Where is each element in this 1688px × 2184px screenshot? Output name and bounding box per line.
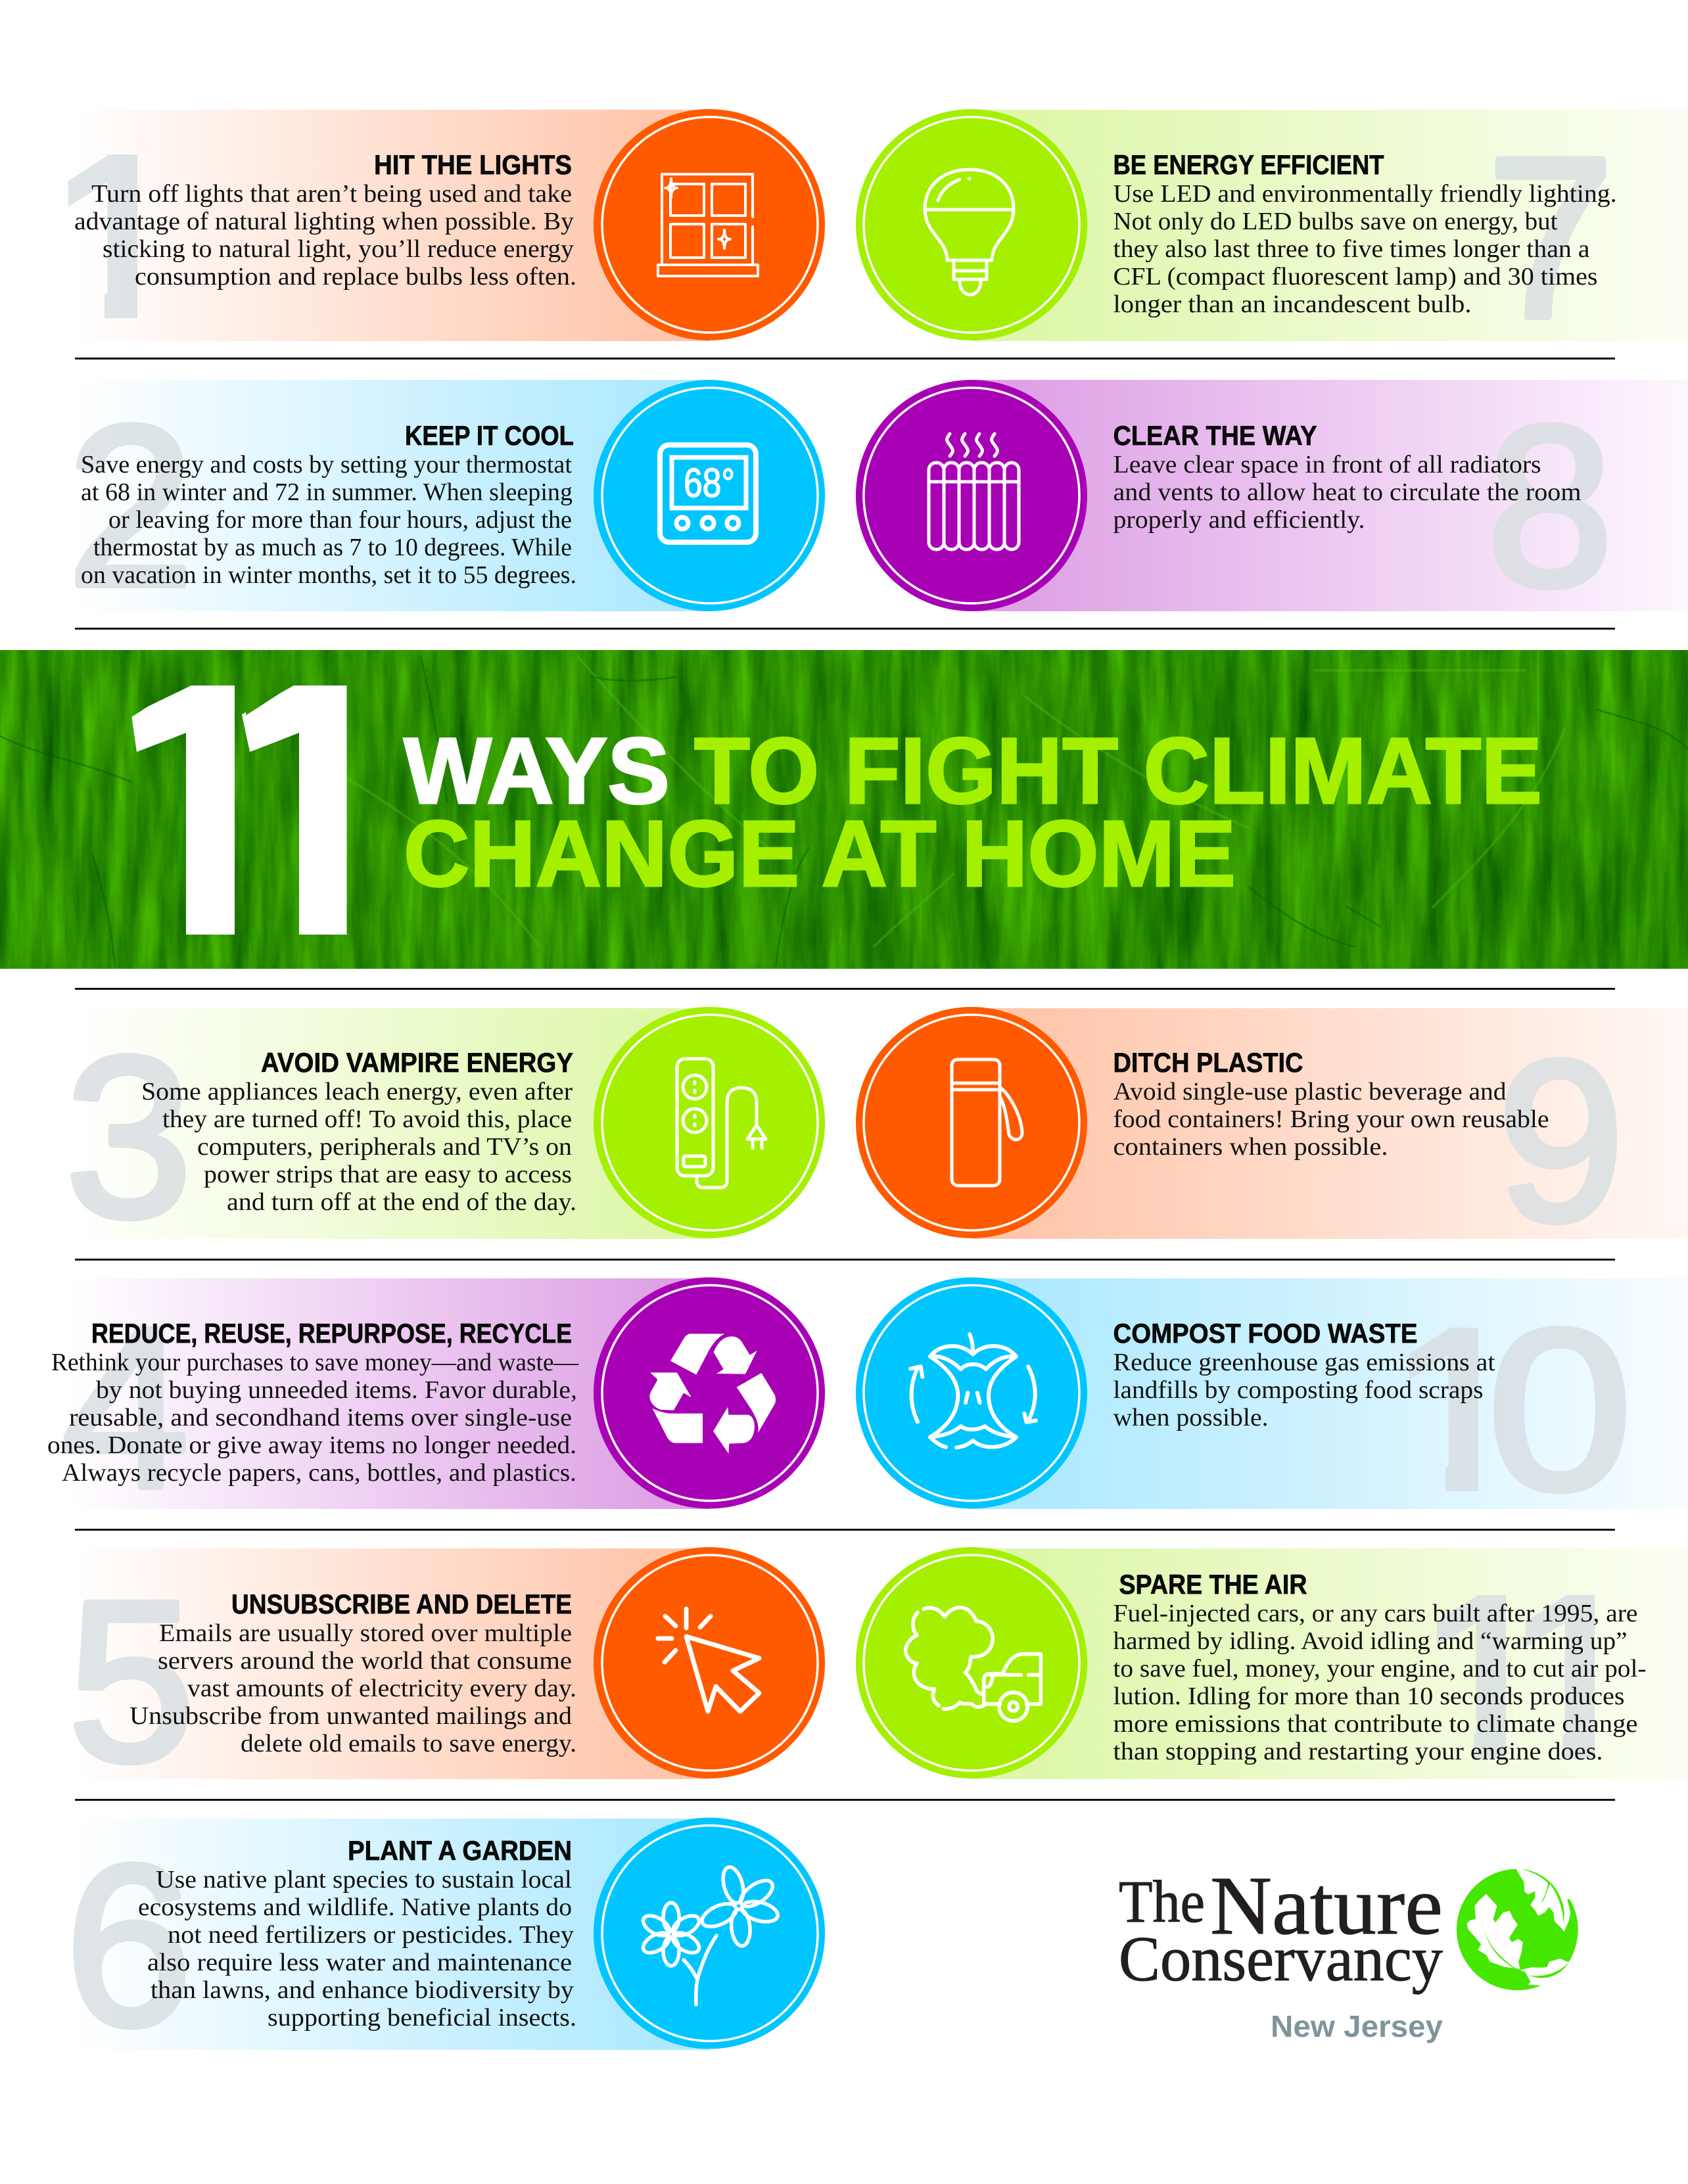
body text: they also last three to five times longer than a (1114, 235, 1590, 263)
number 10: 1 (1393, 1276, 1525, 1542)
body text: power strips that are easy to access (204, 1161, 572, 1188)
rule (75, 1259, 1615, 1261)
icon: thermostat: 68° (684, 461, 735, 506)
rule (75, 358, 1615, 360)
body text: Rethink your purchases to save money—and waste— (51, 1349, 579, 1376)
number 7: 7 (1487, 110, 1614, 365)
icon: apple core compost (910, 1334, 1036, 1447)
title: TO FIGHT CLIMATE (694, 719, 1542, 824)
body text: containers when possible. (1114, 1133, 1388, 1161)
band (972, 1008, 1688, 1239)
number 10: 0 (1488, 1282, 1632, 1538)
body text: Always recycle papers, cans, bottles, and plastics. (62, 1459, 576, 1487)
panel: 9 ditch plastic (856, 1007, 1688, 1268)
rule (75, 628, 1615, 630)
icon: power strip (677, 1059, 766, 1188)
panel: 3 avoid vampire energy (65, 1007, 825, 1265)
icon: car exhaust cloud (906, 1608, 1041, 1721)
panel: 10 compost food waste (856, 1278, 1679, 1509)
logo wordmark: Nature (1210, 1860, 1443, 1952)
title: CHANGE AT HOME (404, 802, 1236, 906)
band (72, 1278, 709, 1509)
body text: Unsubscribe from unwanted mailings and (129, 1702, 572, 1730)
logo subtitle: New Jersey (1271, 2009, 1443, 2043)
body text: Not only do LED bulbs save on energy, but (1114, 208, 1558, 235)
number 6: 6 (65, 1817, 193, 2073)
panel: 7 be energy efficient (856, 109, 1688, 365)
logo wordmark: The (1119, 1869, 1205, 1935)
icon circle (856, 1547, 1087, 1778)
body text: landfills by composting food scraps (1114, 1376, 1483, 1404)
heading: COMPOST FOOD WASTE (1114, 1318, 1417, 1349)
panel: 5 unsubscribe and delete (68, 1547, 825, 1809)
icon circle (594, 1547, 825, 1778)
body text (141, 1078, 576, 1216)
body text: harmed by idling. Avoid idling and “warming up” (1114, 1627, 1628, 1655)
heading: PLANT A GARDEN (348, 1835, 572, 1866)
body text: Leave clear space in front of all radiators (1114, 451, 1541, 478)
icon: flowers (640, 1865, 780, 2005)
rule (75, 1799, 1615, 1801)
band (72, 1819, 709, 2050)
rule (75, 988, 1615, 990)
body text: food containers! Bring your own reusable (1114, 1105, 1549, 1133)
icon circle (594, 380, 825, 611)
body text: Some appliances leach energy, even after (141, 1078, 573, 1105)
body text: than lawns, and enhance biodiversity by (151, 1976, 574, 2004)
panel: 2 keep it cool (67, 378, 825, 634)
body text: Turn off lights that aren’t being used and take (91, 180, 572, 208)
body text: at 68 in winter and 72 in summer. When sleeping (81, 478, 573, 506)
body text: consumption and replace bulbs less often. (135, 263, 576, 290)
number 8: 8 (1486, 378, 1614, 634)
body text (47, 1349, 579, 1487)
body text: servers around the world that consume (158, 1647, 572, 1675)
body text: ecosystems and wildlife. Native plants do (138, 1894, 572, 1921)
heading: BE ENERGY EFFICIENT (1114, 149, 1384, 180)
heading: AVOID VAMPIRE ENERGY (261, 1047, 573, 1078)
body text: computers, peripherals and TV’s on (197, 1133, 572, 1161)
heading: KEEP IT COOL (405, 420, 574, 451)
heading: SPARE THE AIR (1119, 1569, 1307, 1600)
band (972, 1548, 1688, 1779)
body text (1114, 1600, 1646, 1765)
body text: Fuel-injected cars, or any cars built after 1995, are (1114, 1600, 1638, 1627)
body text: thermostat by as much as 7 to 10 degrees. While (93, 534, 572, 561)
body text: by not buying unneeded items. Favor durable, (96, 1376, 577, 1404)
body text (1114, 180, 1617, 318)
icon: window (658, 174, 758, 276)
body text: longer than an incandescent bulb. (1114, 290, 1471, 318)
panel: 4 reduce reuse repurpose recycle (47, 1278, 825, 1535)
body text: and vents to allow heat to circulate the room (1114, 478, 1582, 506)
panel: 11 spare the air (856, 1547, 1688, 1779)
body text (81, 451, 576, 589)
heading: HIT THE LIGHTS (374, 149, 572, 180)
body text: lution. Idling for more than 10 seconds produces (1114, 1683, 1625, 1710)
body text: sticking to natural light, you’ll reduce energy (103, 235, 574, 263)
body text: to save fuel, money, your engine, and to cut air pol- (1114, 1655, 1646, 1683)
icon circle (594, 1278, 825, 1509)
body text: Use LED and environmentally friendly lighting. (1114, 180, 1617, 208)
panel: 1 hit the lights (68, 109, 825, 341)
banner (0, 649, 1688, 969)
body text: CFL (compact fluorescent lamp) and 30 times (1114, 263, 1597, 290)
logo wordmark (1119, 1860, 1443, 1995)
icon: reusable bottle (952, 1059, 1022, 1186)
icon circle (856, 380, 1087, 611)
band (972, 110, 1688, 341)
body text: properly and efficiently. (1114, 506, 1365, 534)
band (972, 1278, 1688, 1509)
icon: recycle arrows (649, 1334, 776, 1454)
icon: mouse cursor click (658, 1609, 759, 1711)
icon: light bulb (925, 170, 1014, 294)
icon circle (856, 109, 1087, 340)
logo wordmark: Conservancy (1119, 1924, 1443, 1995)
body text: Save energy and costs by setting your thermostat (81, 451, 572, 478)
body text (1114, 1078, 1549, 1161)
icon: thermostat (660, 445, 756, 542)
body text: not need fertilizers or pesticides. They (168, 1921, 574, 1949)
number 10 (1409, 1326, 1626, 1495)
band (72, 1008, 709, 1239)
number 4: 4 (62, 1280, 189, 1535)
heading: UNSUBSCRIBE AND DELETE (231, 1589, 572, 1619)
title: WAYS (404, 719, 670, 824)
icon circle (856, 1007, 1087, 1238)
body text: they are turned off! To avoid this, place (162, 1105, 572, 1133)
icon circle (594, 1818, 825, 2049)
body text: Use native plant species to sustain local (156, 1866, 572, 1894)
body text: on vacation in winter months, set it to 55 degrees. (81, 561, 576, 589)
heading: DITCH PLASTIC (1114, 1047, 1303, 1078)
body text: more emissions that contribute to climate change (1114, 1710, 1638, 1738)
number 1: 1 (52, 103, 184, 369)
body text: supporting beneficial insects. (268, 2004, 576, 2032)
banner texture (0, 650, 1688, 969)
body text: vast amounts of electricity every day. (187, 1675, 576, 1702)
number 9: 9 (1497, 1013, 1625, 1268)
logo globe leaf (1457, 1860, 1589, 1998)
number 2: 2 (67, 378, 195, 634)
body text: Avoid single-use plastic beverage and (1114, 1078, 1507, 1105)
body text (138, 1866, 576, 2032)
body text: delete old emails to save energy. (241, 1730, 576, 1757)
number 11: 11 (105, 607, 418, 1011)
number 3: 3 (65, 1009, 193, 1265)
body text: reusable, and secondhand items over single-use (69, 1404, 572, 1431)
number 5: 5 (68, 1553, 195, 1809)
body text: than stopping and restarting your engine does. (1114, 1738, 1603, 1765)
body text: advantage of natural lighting when possible. By (74, 208, 574, 235)
body text: also require less water and maintenance (147, 1949, 572, 1976)
band (72, 1548, 709, 1779)
panel: 8 clear the way (856, 378, 1688, 634)
heading: CLEAR THE WAY (1114, 420, 1317, 451)
logo: the nature conservancy new jersey (1119, 1860, 1589, 2043)
body text: or leaving for more than four hours, adjust the (108, 506, 572, 534)
body text (129, 1619, 576, 1757)
panel: 6 plant a garden (65, 1817, 825, 2073)
title (404, 719, 1542, 906)
icon circle (594, 1007, 825, 1238)
icon: radiator (929, 434, 1019, 549)
body text (74, 180, 576, 290)
band (72, 110, 709, 341)
icon circle (856, 1278, 1087, 1509)
icon circle (594, 109, 825, 340)
body text (1114, 451, 1582, 534)
body text: and turn off at the end of the day. (227, 1188, 576, 1216)
body text: ones. Donate or give away items no longer needed. (47, 1431, 576, 1459)
body text: when possible. (1114, 1404, 1269, 1431)
banner veins (0, 651, 1688, 966)
heading: REDUCE, REUSE, REPURPOSE, RECYCLE (91, 1318, 572, 1349)
body text: Emails are usually stored over multiple (159, 1619, 572, 1647)
body text: Reduce greenhouse gas emissions at (1114, 1349, 1495, 1376)
rule (75, 1529, 1615, 1531)
body text (1114, 1349, 1495, 1431)
number 11: 11 (1420, 1543, 1641, 1809)
band (972, 380, 1688, 611)
band (72, 380, 709, 611)
